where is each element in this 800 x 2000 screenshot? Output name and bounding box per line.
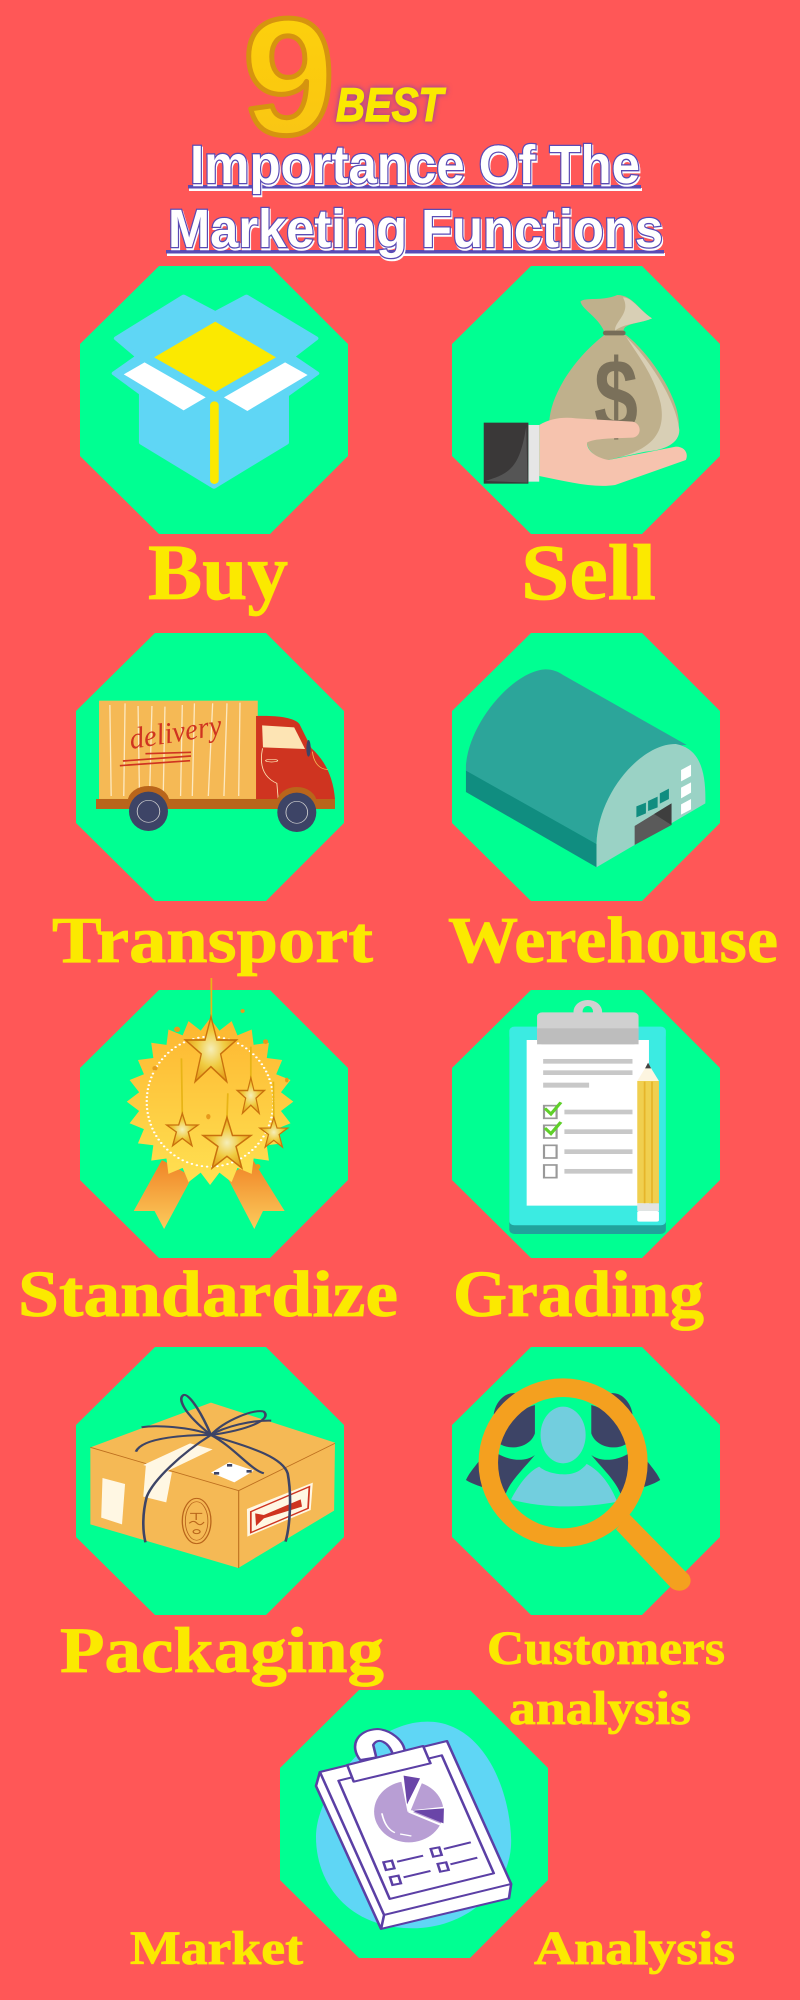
heading line 1: Importance Of The: [190, 135, 640, 195]
octagon: [76, 633, 344, 901]
octagon: [80, 990, 348, 1258]
label: Grading: [453, 1258, 704, 1331]
octagon: [452, 1347, 720, 1615]
octagon: [452, 990, 720, 1258]
label: Standardize: [18, 1258, 398, 1331]
octagon: [80, 266, 348, 534]
icon: tied parcel: [90, 1395, 335, 1568]
panel: packaging: [60, 1347, 384, 1687]
octagon: [452, 266, 720, 534]
icon: open box: [114, 297, 317, 487]
title block: [166, 0, 665, 259]
panel: market analysis: [130, 1690, 735, 1975]
panel: buy: [80, 266, 348, 617]
icon: delivery truck: [96, 701, 335, 832]
label: Packaging: [60, 1615, 384, 1687]
label: Transport: [52, 904, 373, 977]
label: Werehouse: [448, 904, 778, 977]
label: Customers: [487, 1622, 725, 1675]
icon: clipboard checklist: [509, 1000, 666, 1234]
label: Sell: [521, 530, 656, 617]
label: analysis: [509, 1682, 691, 1735]
icon: warehouse building: [466, 669, 705, 867]
panel: standardize: [18, 978, 398, 1331]
icon: hand holding money bag: [484, 295, 687, 486]
icon: magnifier over people: [466, 1378, 691, 1591]
dollar sign: $: [594, 339, 638, 455]
label: market: Market: [130, 1922, 303, 1975]
octagon: [76, 1347, 344, 1615]
panel: grading: [452, 990, 720, 1331]
label: analysis: Analysis: [534, 1922, 735, 1975]
panel: transport: [52, 633, 373, 977]
truck lettering: delivery: [127, 709, 225, 756]
icon: rosette with stars: [127, 978, 293, 1229]
label: [487, 1622, 725, 1735]
heading line 2: Marketing Functions: [168, 199, 663, 259]
panel: customers analysis: [452, 1347, 725, 1735]
icon: report clipboard with pie chart: [316, 1722, 511, 1929]
panel: warehouse: [448, 633, 778, 977]
panel: sell: [452, 266, 720, 617]
octagon: [280, 1690, 548, 1958]
heading: best: BEST: [336, 78, 447, 131]
octagon: [452, 633, 720, 901]
label: Buy: [148, 530, 288, 617]
